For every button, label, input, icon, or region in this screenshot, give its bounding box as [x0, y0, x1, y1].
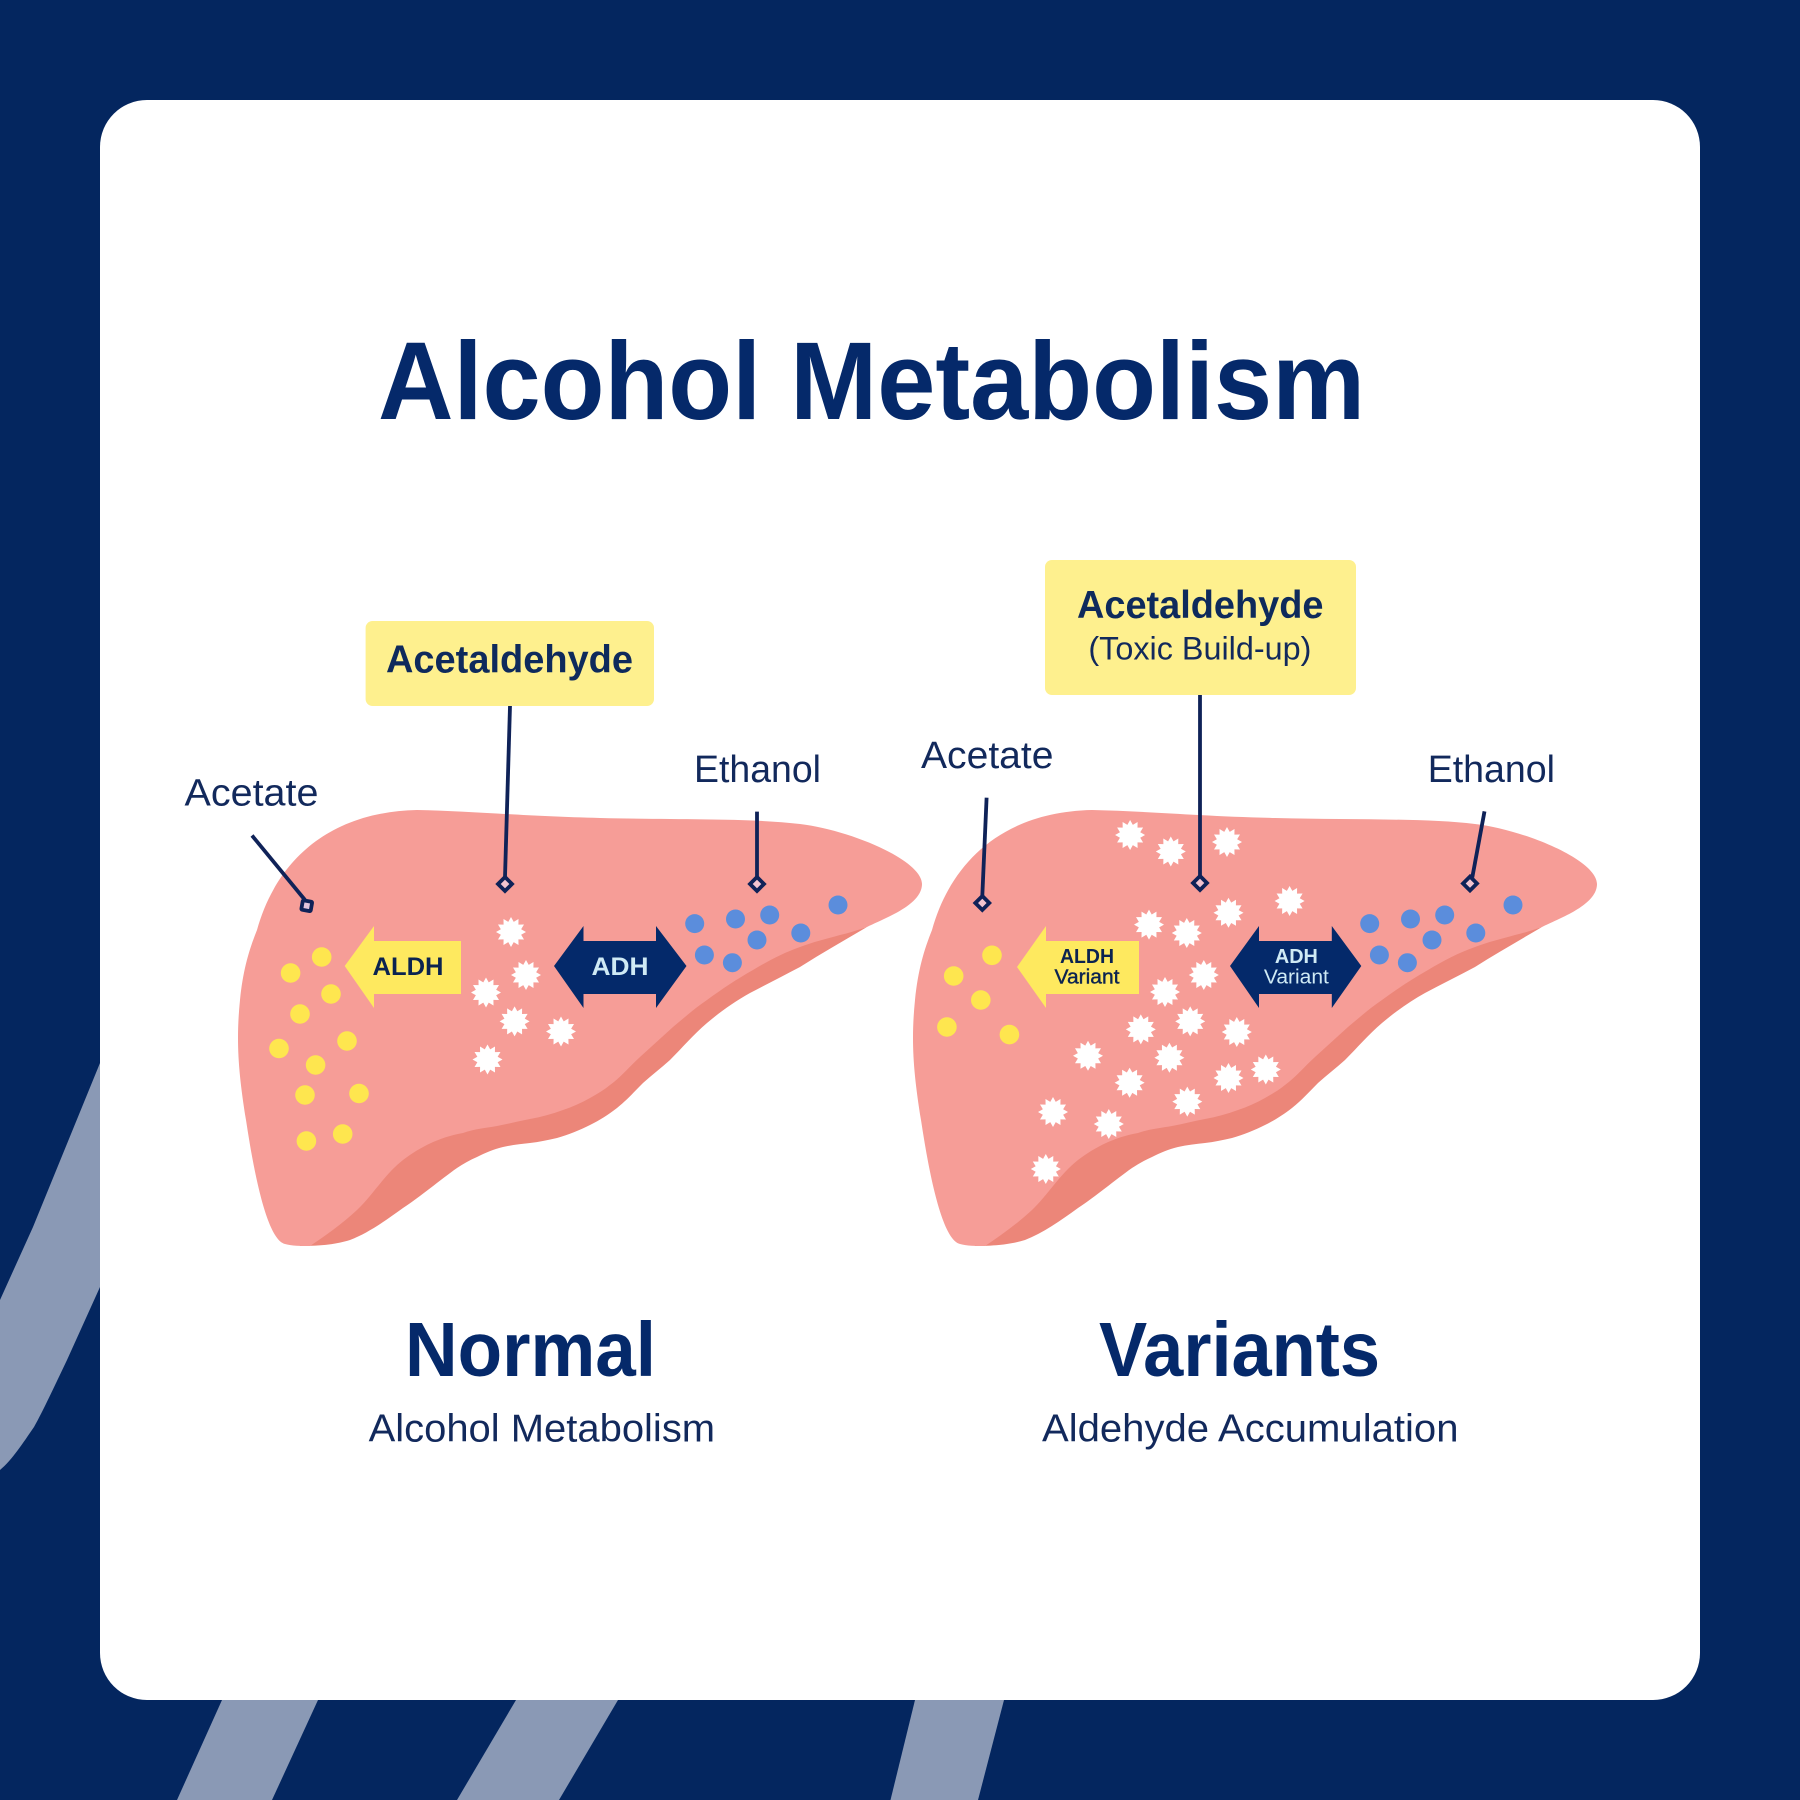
subheading: alcohol metabolism: Alcohol Metabolism: [369, 1408, 715, 1451]
decorative stripes: bottom: [177, 1700, 1004, 1800]
arrow: ALDH variant: [1017, 926, 1139, 1008]
leader line: acetate: [975, 798, 989, 910]
ethanol dots: [1360, 896, 1522, 972]
liver illustration: normal: [238, 810, 922, 1246]
subheading: aldehyde accumulation: Aldehyde Accumulation: [1042, 1408, 1458, 1451]
leader line: ethanol: [1463, 811, 1484, 890]
panel: normal alcohol metabolism: [184, 621, 922, 1451]
arrow: ALDH variant: Variant: [1054, 967, 1120, 989]
title: Alcohol Metabolism: [378, 320, 1365, 443]
arrow: ADH variant: [1230, 926, 1361, 1008]
label: acetaldehyde toxic build-up: [1045, 560, 1356, 695]
heading: variants: Variants: [1099, 1307, 1380, 1393]
heading: normal: Normal: [405, 1307, 656, 1393]
acetaldehyde stars: [471, 917, 576, 1074]
ethanol dots: [685, 896, 848, 972]
arrow: ALDH variant: ALDH: [1060, 946, 1114, 968]
arrow: ADH: [554, 926, 686, 1008]
arrow: ALDH: [345, 926, 461, 1008]
acetate dots: [269, 947, 369, 1151]
panel: variants aldehyde accumulation: [913, 560, 1597, 1451]
leader line: ethanol: [750, 812, 764, 891]
label: acetaldehyde: Acetaldehyde: [386, 638, 633, 682]
arrow: ADH: ADH: [592, 953, 648, 981]
label: acetaldehyde toxic build-up: (Toxic Build-up): [1088, 630, 1311, 666]
acetaldehyde stars: [1031, 820, 1305, 1184]
leader line: acetate: [252, 836, 312, 911]
arrow: ADH variant: Variant: [1264, 967, 1329, 989]
arrow: ALDH: ALDH: [372, 953, 444, 981]
decorative stripe: left: [0, 1063, 100, 1470]
arrow: ADH variant: ADH: [1275, 946, 1318, 968]
label: acetaldehyde toxic build-up: Acetaldehyde: [1077, 584, 1324, 627]
leader line: acetaldehyde: [1193, 695, 1207, 890]
white card panel: [100, 100, 1700, 1700]
label: ethanol: Ethanol: [694, 749, 821, 791]
label: acetate: Acetate: [921, 735, 1054, 777]
liver illustration: variants: [913, 810, 1597, 1246]
leader line: acetaldehyde: [498, 706, 512, 891]
acetate dots: [937, 946, 1019, 1044]
label: acetate: Acetate: [184, 773, 318, 815]
label: ethanol: Ethanol: [1428, 749, 1555, 791]
label: acetaldehyde: [366, 621, 654, 706]
